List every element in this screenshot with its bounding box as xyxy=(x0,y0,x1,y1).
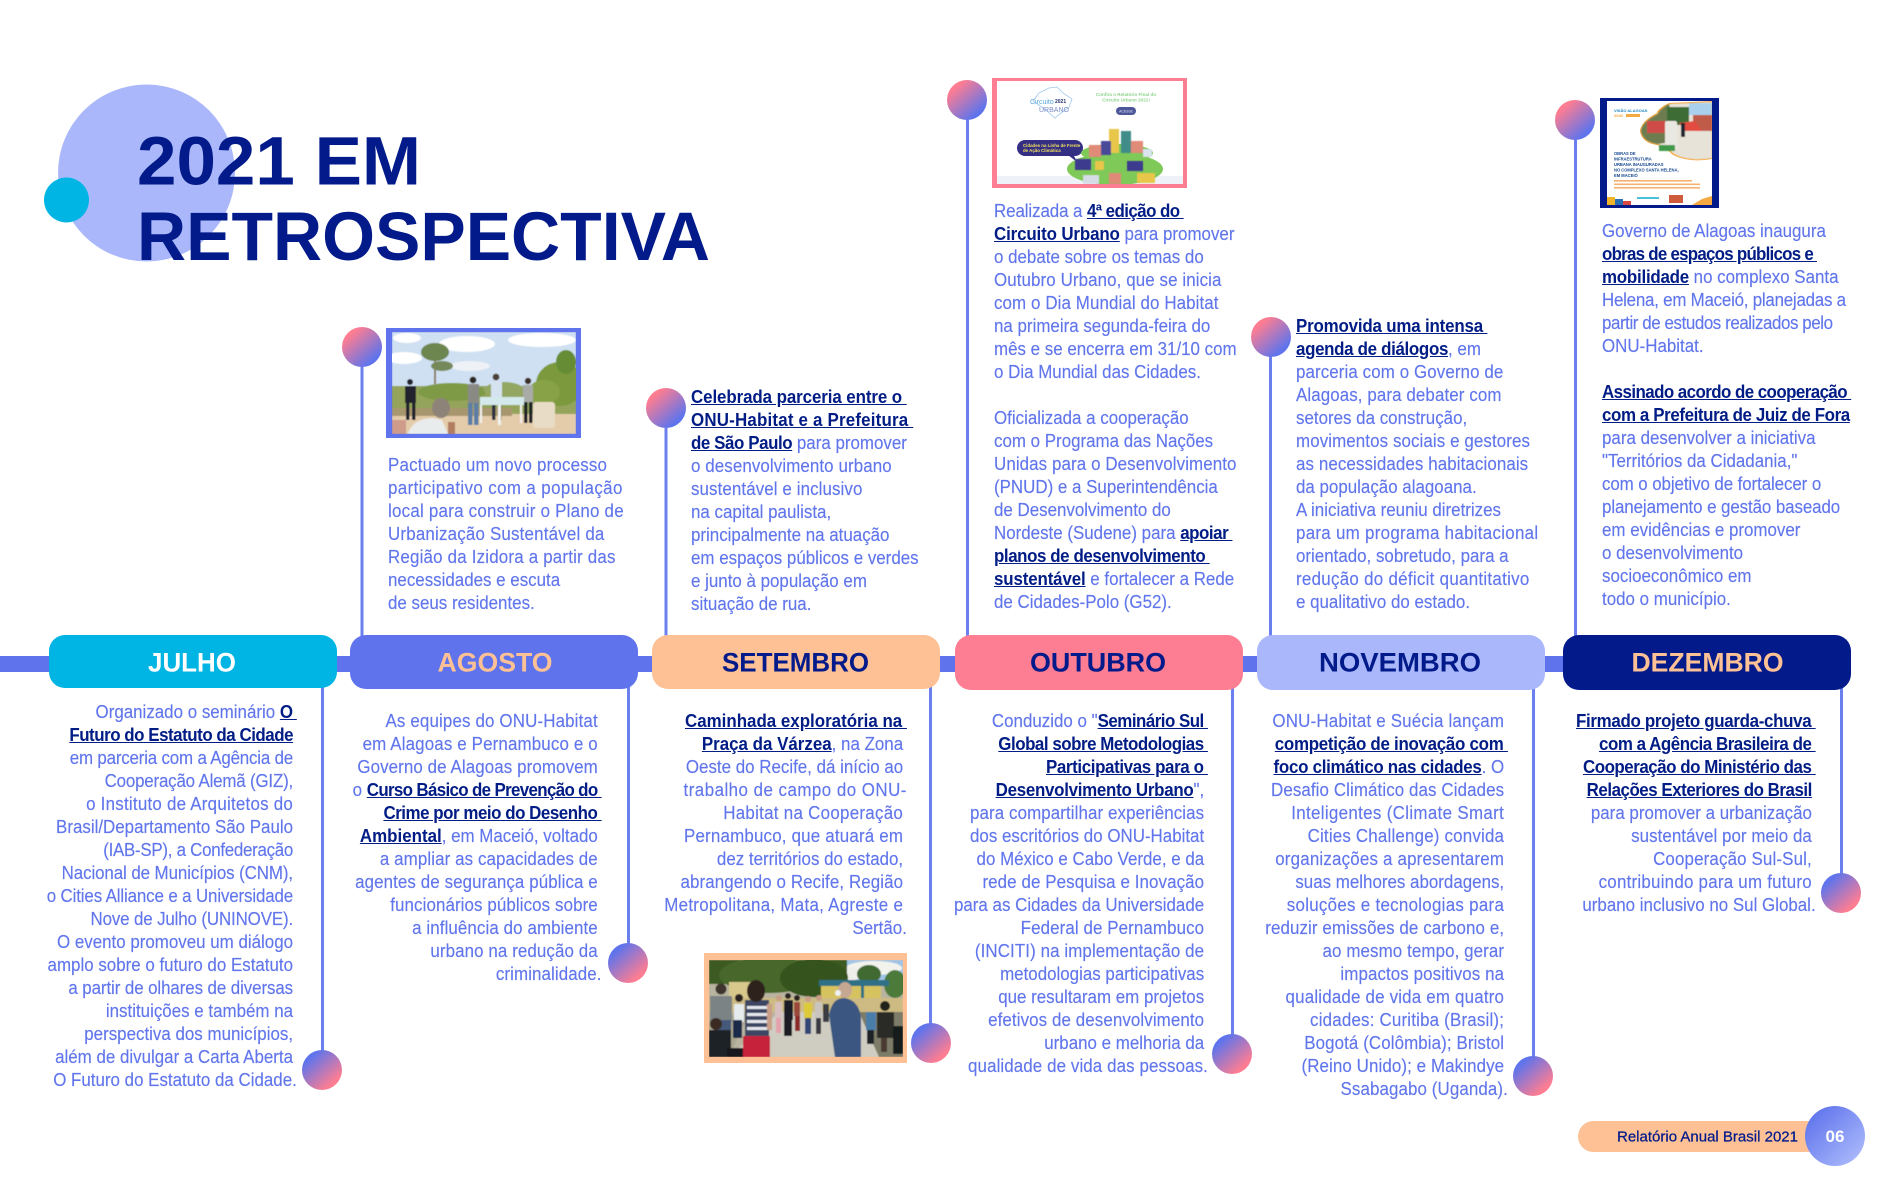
text: dezembro: Cooperação do Ministério das xyxy=(1583,757,1812,777)
text: novembro top: e qualitativo do estado. xyxy=(1296,592,1470,612)
text: novembro: ao mesmo tempo, gerar xyxy=(1322,941,1504,961)
text: julho: (IAB-SP), a Confederação xyxy=(103,840,293,860)
text: outubro: rede de Pesquisa e Inovação xyxy=(982,872,1204,892)
text: setembro top: na capital paulista, xyxy=(691,502,831,522)
text: novembro xyxy=(1265,711,1508,1100)
text: dezembro top: Governo de Alagoas inaugura xyxy=(1602,220,1826,240)
text: outubro top: Unidas para o Desenvolvimento xyxy=(994,454,1237,474)
image: dezembro, Visão Alagoas report cover: OBRAS DE xyxy=(1614,151,1636,156)
text: dezembro: sustentável por meio da xyxy=(1631,826,1812,846)
text: dezembro: Relações Exteriores do Brasil xyxy=(1587,780,1812,800)
text: agosto: Crime por meio do Desenho xyxy=(384,803,598,823)
text: dezembro top: "Territórios da Cidadania," xyxy=(1602,450,1797,470)
text: outubro top: Oficializada a cooperação xyxy=(994,408,1189,428)
page number badge: 06 xyxy=(1826,1127,1844,1146)
text: outubro top: Outubro Urbano, que se inicia xyxy=(994,270,1222,290)
text: setembro top: em espaços públicos e verdes xyxy=(691,548,919,568)
text: dezembro: urbano inclusivo no Sul Global. xyxy=(1582,895,1816,915)
text: agosto top: Urbanização Sustentável da xyxy=(388,524,605,544)
text: julho: O evento promoveu um diálogo xyxy=(57,932,293,952)
text: setembro: abrangendo o Recife, Região xyxy=(680,872,903,892)
photo: setembro, exploratory walk xyxy=(704,953,907,1063)
text: novembro: ONU-Habitat e Suécia lançam xyxy=(1272,711,1504,731)
connector: julho down xyxy=(302,680,342,1090)
text: outubro: (INCITI) na implementação de xyxy=(975,941,1204,961)
text: novembro top: Promovida uma intensa xyxy=(1296,316,1483,336)
text: agosto top: participativo com a população xyxy=(388,478,623,498)
text: setembro: Metropolitana, Mata, Agreste e xyxy=(664,895,903,915)
text: outubro top: de Desenvolvimento do xyxy=(994,500,1171,520)
decorative title circle: cyan xyxy=(44,178,89,222)
text: agosto: urbano na redução da xyxy=(431,941,598,961)
text: novembro: foco climático nas cidades. O xyxy=(1273,757,1504,777)
text: novembro: Cities Challenge) convida xyxy=(1307,826,1504,846)
text: setembro: Sertão. xyxy=(852,918,907,938)
text: outubro top: Realizada a 4ª edição do xyxy=(994,200,1180,220)
text: outubro: Federal de Pernambuco xyxy=(1020,918,1204,938)
connector: novembro down xyxy=(1513,680,1553,1096)
text: dezembro: para promover a urbanização xyxy=(1591,803,1812,823)
text: outubro: Participativas para o xyxy=(1046,757,1203,777)
text: outubro: qualidade de vida das pessoas. xyxy=(968,1056,1208,1076)
image: outubro, Circuito Urbano report banner: 2021 xyxy=(1055,99,1066,105)
text: julho: Cooperação Alemã (GIZ), xyxy=(105,771,293,791)
text: outubro top: planos de desenvolvimento xyxy=(994,546,1205,566)
text: agosto: em Alagoas e Pernambuco e o xyxy=(363,734,598,754)
image: dezembro, Visão Alagoas report cover: INFRAESTRUTURA xyxy=(1614,156,1652,162)
title xyxy=(137,122,710,275)
text: novembro: Bogotá (Colômbia); Bristol xyxy=(1304,1033,1504,1053)
month pill: novembro: NOVEMBRO xyxy=(1319,648,1481,678)
timeline bar xyxy=(0,656,1570,672)
image: dezembro, Visão Alagoas report cover: URBANA INAUGURADAS xyxy=(1614,162,1664,167)
text: dezembro top: em evidências e promover xyxy=(1602,520,1800,540)
text: agosto: funcionários públicos sobre xyxy=(390,895,598,915)
text: outubro: Global sobre Metodologias xyxy=(998,734,1204,754)
text: outubro top: Nordeste (Sudene) para apoiar xyxy=(994,522,1228,542)
text: setembro: trabalho de campo do ONU- xyxy=(683,780,907,800)
text: dezembro: contribuindo para um futuro xyxy=(1599,872,1812,892)
image: dezembro, Visão Alagoas report cover: EM MACEIÓ xyxy=(1614,173,1638,178)
text: julho: em parceria com a Agência de xyxy=(70,748,293,768)
text: outubro: metodologias participativas xyxy=(1000,964,1204,984)
text: novembro top: agenda de diálogos, em xyxy=(1296,338,1481,358)
text: agosto top: Região da Izidora a partir das xyxy=(388,546,616,566)
text: novembro top: da população alagoana. xyxy=(1296,476,1477,496)
text: dezembro: com a Agência Brasileira de xyxy=(1599,734,1812,754)
text: julho: além de divulgar a Carta Aberta xyxy=(55,1047,293,1067)
footer pill: Relatório Anual Brasil 2021 xyxy=(1617,1130,1798,1146)
text: setembro: dez territórios do estado, xyxy=(717,849,903,869)
text: agosto: o Curso Básico de Prevenção do xyxy=(353,780,598,800)
image: outubro, Circuito Urbano report banner xyxy=(992,78,1187,188)
text: outubro xyxy=(954,711,1208,1076)
text: agosto: a ampliar as capacidades de xyxy=(380,849,598,869)
text: novembro: suas melhores abordagens, xyxy=(1295,872,1504,892)
text: novembro top: as necessidades habitacionais xyxy=(1296,454,1528,474)
text: outubro top: de Cidades-Polo (G52). xyxy=(994,592,1172,612)
text: dezembro top: Assinado acordo de cooperação xyxy=(1602,382,1847,402)
text: novembro top: redução do déficit quantitativo xyxy=(1296,568,1530,588)
text: dezembro top: ONU-Habitat. xyxy=(1602,336,1704,356)
text: novembro: soluções e tecnologias para xyxy=(1287,895,1504,915)
text: julho: Nacional de Municípios (CNM), xyxy=(62,863,293,883)
month pill: setembro xyxy=(652,635,940,689)
month pill: setembro: SETEMBRO xyxy=(722,648,869,678)
text: setembro top: Celebrada parceria entre o xyxy=(691,386,902,406)
text: outubro: efetivos de desenvolvimento xyxy=(988,1010,1204,1030)
text: outubro: que resultaram em projetos xyxy=(998,987,1204,1007)
text: novembro: Inteligentes (Climate Smart xyxy=(1291,803,1504,823)
text: setembro: Habitat na Cooperação xyxy=(723,803,903,823)
text: novembro top: Alagoas, para debater com xyxy=(1296,384,1502,404)
text: setembro xyxy=(664,711,907,938)
text: setembro top: ONU-Habitat e a Prefeitura xyxy=(691,410,908,430)
text: dezembro top: planejamento e gestão baseado xyxy=(1602,496,1840,516)
text: outubro top: mês e se encerra em 31/10 com xyxy=(994,338,1237,358)
image: outubro, Circuito Urbano report banner: Confira o Relatório Final do xyxy=(1096,92,1156,97)
text: outubro top: sustentável e fortalecer a Rede xyxy=(994,568,1234,588)
text: agosto xyxy=(353,711,602,984)
image: dezembro, Visão Alagoas report cover: 2030 xyxy=(1614,113,1624,118)
month pill: agosto: AGOSTO xyxy=(438,648,552,678)
image: outubro, Circuito Urbano report banner: ACESSE xyxy=(1119,110,1134,114)
text: novembro: organizações a apresentarem xyxy=(1275,849,1504,869)
text: novembro top: orientado, sobretudo, para a xyxy=(1296,546,1509,566)
text: outubro: Desenvolvimento Urbano", xyxy=(995,780,1204,800)
text: novembro top: parceria com o Governo de xyxy=(1296,362,1503,382)
text: novembro: reduzir emissões de carbono e, xyxy=(1265,918,1504,938)
text: novembro: (Reino Unido); e Makindye xyxy=(1301,1056,1504,1076)
text: agosto: agentes de segurança pública e xyxy=(355,872,598,892)
connector: dezembro down xyxy=(1821,680,1861,913)
title: RETROSPECTIVA xyxy=(137,198,710,275)
text: julho: Futuro do Estatuto da Cidade xyxy=(69,725,293,745)
image: outubro, Circuito Urbano report banner: Cidades na Linha de Frente xyxy=(1023,143,1081,148)
text: outubro: do México e Cabo Verde, e da xyxy=(976,849,1204,869)
text: agosto: criminalidade. xyxy=(496,964,602,984)
text: outubro top: (PNUD) e a Superintendência xyxy=(994,476,1218,496)
text: outubro: Conduzido o "Seminário Sul xyxy=(992,711,1204,731)
text: novembro: qualidade de vida em quatro xyxy=(1285,987,1504,1007)
connector: setembro up xyxy=(646,388,686,637)
page number badge xyxy=(1805,1106,1865,1166)
text: outubro top: na primeira segunda-feira do xyxy=(994,316,1210,336)
text: julho: O Futuro do Estatuto da Cidade. xyxy=(53,1070,297,1090)
text: dezembro top: com a Prefeitura de Juiz de Fora xyxy=(1602,404,1850,424)
text: setembro top: situação de rua. xyxy=(691,594,811,614)
month pill: novembro xyxy=(1257,635,1545,690)
text: setembro top xyxy=(691,386,919,614)
text: setembro top: o desenvolvimento urbano xyxy=(691,456,892,476)
text: agosto top xyxy=(388,454,624,612)
decorative title circle: lilac xyxy=(58,84,235,262)
image: outubro, Circuito Urbano report banner: Circuito xyxy=(1030,99,1054,106)
text: outubro: dos escritórios do ONU-Habitat xyxy=(970,826,1204,846)
text: setembro top: sustentável e inclusivo xyxy=(691,478,862,498)
month pill: outubro xyxy=(955,635,1243,690)
text: julho: perspectiva dos municípios, xyxy=(84,1024,293,1044)
text: novembro top: para um programa habitacional xyxy=(1296,522,1538,542)
text: agosto: Governo de Alagoas promovem xyxy=(358,757,598,777)
footer pill xyxy=(1578,1121,1823,1152)
text: agosto: a influência do ambiente xyxy=(412,918,598,938)
text: outubro top: com o Dia Mundial do Habitat xyxy=(994,292,1219,312)
text: agosto top: Pactuado um novo processo xyxy=(388,454,607,474)
text: outubro top: Circuito Urbano para promover xyxy=(994,224,1234,244)
text: julho: amplo sobre o futuro do Estatuto xyxy=(47,955,293,975)
connector: outubro down xyxy=(1212,680,1252,1074)
text: agosto: Ambiental, em Maceió, voltado xyxy=(360,826,598,846)
text: outubro: urbano e melhoria da xyxy=(1044,1033,1204,1053)
connector: novembro up xyxy=(1251,317,1291,637)
image: dezembro, Visão Alagoas report cover: VISÃO ALAGOAS xyxy=(1614,108,1648,113)
text: agosto top: necessidades e escuta xyxy=(388,570,560,590)
text: dezembro: Cooperação Sul-Sul, xyxy=(1653,849,1812,869)
text: dezembro top xyxy=(1602,220,1852,610)
connector: agosto down xyxy=(608,680,648,983)
month pill: dezembro xyxy=(1563,635,1851,690)
text: novembro: cidades: Curitiba (Brasil); xyxy=(1310,1010,1504,1030)
text: julho: o Instituto de Arquitetos do xyxy=(86,794,293,814)
month pill: julho: JULHO xyxy=(148,648,236,678)
photo: agosto, community meeting xyxy=(386,328,584,438)
text: dezembro top: para desenvolver a iniciativa xyxy=(1602,428,1816,448)
image: dezembro, Visão Alagoas report cover: NO COMPLEXO SANTA HELENA, xyxy=(1614,168,1679,172)
month pill: outubro: OUTUBRO xyxy=(1030,648,1166,678)
text: outubro: para compartilhar experiências xyxy=(970,803,1204,823)
text: setembro top: e junto à população em xyxy=(691,570,867,590)
text: dezembro: Firmado projeto guarda-chuva xyxy=(1576,711,1811,731)
title: 2021 EM xyxy=(137,122,421,200)
text: agosto top: local para construir o Plano de xyxy=(388,500,624,520)
connector: outubro up xyxy=(947,80,987,637)
text: julho: Brasil/Departamento São Paulo xyxy=(56,817,293,837)
text: julho: instituições e também na xyxy=(106,1001,293,1021)
month pill: dezembro: DEZEMBRO xyxy=(1632,648,1784,678)
text: dezembro top: obras de espaços públicos e xyxy=(1602,244,1813,264)
text: setembro top: principalmente na atuação xyxy=(691,524,889,544)
text: novembro top xyxy=(1296,316,1538,612)
text: agosto top: de seus residentes. xyxy=(388,592,535,612)
connector: agosto up xyxy=(342,327,382,637)
text: novembro top: A iniciativa reuniu diretrizes xyxy=(1296,500,1501,520)
text: julho: o Cities Alliance e a Universidade xyxy=(47,886,293,906)
image: outubro, Circuito Urbano report banner: URBANO xyxy=(1039,107,1070,114)
text: julho: a partir de olhares de diversas xyxy=(68,978,293,998)
text: novembro: impactos positivos na xyxy=(1340,964,1504,984)
text: outubro top xyxy=(994,200,1237,612)
text: agosto: As equipes do ONU-Habitat xyxy=(386,711,598,731)
text: outubro top: com o Programa das Nações xyxy=(994,430,1213,450)
text: novembro: Ssabagabo (Uganda). xyxy=(1340,1079,1508,1099)
text: dezembro top: o desenvolvimento xyxy=(1602,542,1743,562)
text: setembro: Caminhada exploratória na xyxy=(685,711,902,731)
text: setembro top: de São Paulo para promover xyxy=(691,432,907,452)
text: novembro: Desafio Climático das Cidades xyxy=(1271,780,1504,800)
text: dezembro top: com o objetivo de fortalecer o xyxy=(1602,474,1821,494)
text: setembro: Oeste do Recife, dá início ao xyxy=(686,757,903,777)
text: dezembro xyxy=(1576,711,1816,915)
text: outubro top: o Dia Mundial das Cidades. xyxy=(994,362,1201,382)
text: setembro: Praça da Várzea, na Zona xyxy=(702,734,903,754)
connector: dezembro up xyxy=(1555,100,1595,637)
text: outubro top: o debate sobre os temas do xyxy=(994,246,1204,266)
text: dezembro top: socioeconômico em xyxy=(1602,566,1752,586)
text: dezembro top: partir de estudos realizados pelo xyxy=(1602,312,1833,332)
image: outubro, Circuito Urbano report banner: Circuito Urbano 2021! xyxy=(1102,98,1150,102)
text: julho: Nove de Julho (UNINOVE). xyxy=(90,909,293,929)
text: dezembro top: mobilidade no complexo Santa xyxy=(1602,266,1839,286)
image: dezembro, Visão Alagoas report cover xyxy=(1600,98,1719,208)
text: outubro: para as Cidades da Universidade xyxy=(954,895,1204,915)
text: novembro: competição de inovação com xyxy=(1275,734,1503,754)
image: outubro, Circuito Urbano report banner: de Ação Climática xyxy=(1023,148,1061,153)
text: novembro top: movimentos sociais e gestores xyxy=(1296,430,1530,450)
month pill: agosto xyxy=(350,635,638,689)
text: setembro: Pernambuco, que atuará em xyxy=(684,826,903,846)
text: julho: Organizado o seminário O xyxy=(95,702,293,722)
text: dezembro top: todo o município. xyxy=(1602,588,1731,608)
text: novembro top: setores da construção, xyxy=(1296,408,1467,428)
connector: setembro down xyxy=(911,680,951,1063)
text: julho xyxy=(47,702,297,1090)
text: dezembro top: Helena, em Maceió, planejadas a xyxy=(1602,290,1846,310)
month pill: julho xyxy=(49,635,337,688)
